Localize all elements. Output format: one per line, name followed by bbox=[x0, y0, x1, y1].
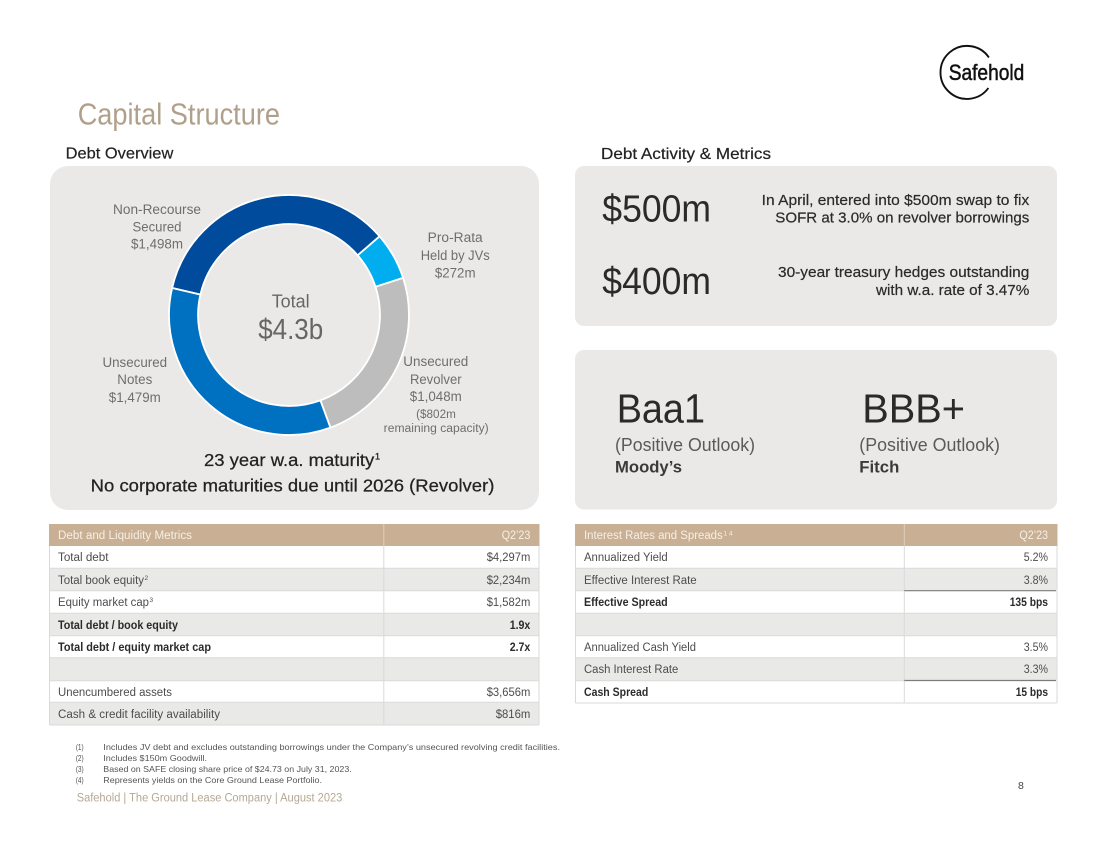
row: Annualized Yield: 5.2% bbox=[1024, 552, 1048, 564]
row: Equity market cap bbox=[58, 597, 530, 609]
row: Total debt / book equity: Total debt / book equity bbox=[58, 620, 179, 632]
segment: Unsecured Revolver bbox=[320, 278, 409, 428]
text: treasury hedges description bbox=[778, 265, 1029, 299]
text: treasury hedges description: with w.a. rate of 3.47% bbox=[875, 283, 1029, 299]
row: Cash Spread: Cash Spread bbox=[584, 687, 648, 699]
metric: $500m: $500m bbox=[602, 189, 711, 231]
row: Total book equity: $2,234m bbox=[487, 575, 530, 587]
row: Annualized Yield: Annualized Yield bbox=[584, 552, 668, 564]
label: Unsecured Revolver: remaining capacity) bbox=[384, 423, 489, 435]
label: Unsecured Notes bbox=[102, 355, 167, 405]
footnotes: (4) bbox=[76, 775, 84, 785]
row: Unencumbered assets: $3,656m bbox=[487, 687, 530, 699]
label: Pro-Rata Held by JVs: Held by JVs bbox=[421, 248, 490, 263]
row: Total debt / equity market cap: Total debt / equity market cap bbox=[58, 642, 211, 654]
table header: 1 4 bbox=[724, 530, 733, 538]
table header: Debt and Liquidity Metrics bbox=[58, 530, 192, 542]
row: Effective Interest Rate: Effective Interest Rate bbox=[584, 575, 697, 587]
rating: Fitch: BBB+ bbox=[862, 386, 965, 432]
row: Equity market cap: $1,582m bbox=[487, 597, 530, 609]
panel: debt overview bbox=[50, 166, 539, 510]
label: Non-Recourse Secured: $1,498m bbox=[131, 237, 183, 252]
row: Cash Interest Rate: 3.3% bbox=[1024, 664, 1048, 676]
row: Unencumbered assets bbox=[58, 687, 530, 699]
logo: Safehold bbox=[940, 46, 1024, 99]
rating: Moody's: Baa1 bbox=[617, 386, 705, 432]
table: interest rates and spreads bbox=[575, 524, 1058, 703]
label: Unsecured Revolver: Revolver bbox=[410, 372, 462, 387]
callout: maturity: 1 bbox=[375, 452, 380, 462]
label: Unsecured Revolver bbox=[384, 354, 489, 435]
row: Equity market cap: Equity market cap bbox=[58, 597, 149, 609]
segment: Unsecured Notes bbox=[169, 288, 330, 435]
table header bbox=[575, 524, 1058, 546]
segment: Non-Recourse Secured bbox=[172, 195, 380, 295]
label: Unsecured Notes: Unsecured bbox=[102, 355, 167, 370]
title: Capital Structure bbox=[78, 96, 280, 132]
footnotes: Includes $150m Goodwill. bbox=[103, 753, 207, 763]
label: Pro-Rata Held by JVs: Pro-Rata bbox=[428, 230, 483, 245]
label: Unsecured Revolver: ($802m bbox=[416, 409, 456, 421]
rating: Moody's: (Positive Outlook) bbox=[615, 435, 755, 455]
row: Annualized Cash Yield bbox=[584, 642, 1048, 654]
heading: Debt Activity & Metrics: Debt Activity & Metrics bbox=[601, 146, 771, 163]
donut centre total: $4.3b bbox=[258, 314, 323, 346]
row: Cash & credit facility availability bbox=[58, 709, 530, 721]
callout: maturity bbox=[91, 450, 494, 496]
text: swap description bbox=[762, 193, 1030, 227]
callout: maturity: No corporate maturities due until 2026 (Revolver) bbox=[91, 476, 494, 496]
table header: Q2’23 bbox=[1019, 530, 1048, 542]
row: Effective Interest Rate bbox=[584, 575, 1048, 587]
row: Total debt / book equity bbox=[58, 620, 531, 632]
row: Total book equity: 2 bbox=[144, 575, 148, 582]
callout: maturity: 23 year w.a. maturity bbox=[204, 450, 375, 470]
heading: Debt Overview: Debt Overview bbox=[66, 146, 174, 162]
rating: Moody's bbox=[615, 386, 755, 477]
table: debt and liquidity metrics bbox=[49, 524, 540, 725]
row: Effective Spread: 135 bps bbox=[1010, 597, 1048, 609]
footnotes: (1) bbox=[76, 742, 84, 752]
row: Annualized Cash Yield: Annualized Cash Yield bbox=[584, 642, 696, 654]
table header bbox=[49, 524, 540, 546]
row: Effective Spread bbox=[584, 597, 1048, 609]
footnotes: Includes JV debt and excludes outstanding borrowings under the Company’s unsecured revolving credit facilities. bbox=[103, 742, 560, 752]
panel: credit ratings bbox=[575, 350, 1057, 510]
row: Total debt / equity market cap bbox=[58, 642, 531, 654]
row: Cash Spread bbox=[584, 687, 1048, 699]
table header: Q2’23 bbox=[502, 530, 530, 542]
row: Cash & credit facility availability: $816m bbox=[496, 709, 530, 721]
label: Pro-Rata Held by JVs: $272m bbox=[435, 266, 476, 281]
label: Unsecured Notes: Notes bbox=[117, 372, 153, 387]
footnotes: (3) bbox=[76, 764, 84, 774]
row: Total debt bbox=[58, 552, 530, 564]
label: Pro-Rata Held by JVs bbox=[421, 230, 490, 281]
row: Cash & credit facility availability: Cash & credit facility availability bbox=[58, 709, 220, 721]
donut centre total: Total bbox=[272, 292, 310, 312]
rating: Fitch: (Positive Outlook) bbox=[859, 435, 1000, 455]
row: Cash Interest Rate bbox=[584, 664, 1048, 676]
table header: Interest Rates and Spreads bbox=[584, 530, 723, 542]
row: Equity market cap: 3 bbox=[150, 597, 154, 604]
footnotes: Represents yields on the Core Ground Lease Portfolio. bbox=[103, 775, 322, 785]
row: Total debt: $4,297m bbox=[487, 552, 530, 564]
row: Total debt / equity market cap: 2.7x bbox=[510, 642, 531, 654]
row: Total debt: Total debt bbox=[58, 552, 109, 564]
donut centre total bbox=[258, 292, 323, 346]
label: Non-Recourse Secured: Secured bbox=[132, 220, 182, 235]
donut chart: debt composition bbox=[169, 195, 409, 435]
row: Effective Interest Rate: 3.8% bbox=[1024, 575, 1048, 587]
row: Annualized Cash Yield: 3.5% bbox=[1024, 642, 1048, 654]
footnotes: Based on SAFE closing share price of $24.73 on July 31, 2023. bbox=[103, 764, 352, 774]
row: Cash Spread: 15 bps bbox=[1016, 687, 1048, 699]
metric: $400m: $400m bbox=[602, 261, 711, 303]
text: swap description: In April, entered into $500m swap to fix bbox=[762, 193, 1030, 209]
row: Total book equity: Total book equity bbox=[58, 575, 144, 587]
text: swap description: SOFR at 3.0% on revolver borrowings bbox=[775, 211, 1029, 227]
page number: 8 bbox=[1018, 780, 1024, 792]
footnotes: (2) bbox=[76, 753, 84, 763]
row: Total book equity bbox=[58, 575, 530, 587]
row: Unencumbered assets: Unencumbered assets bbox=[58, 687, 172, 699]
label: Non-Recourse Secured bbox=[113, 202, 201, 252]
label: Non-Recourse Secured: Non-Recourse bbox=[113, 202, 201, 217]
rating: Moody's: Moody’s bbox=[615, 458, 682, 477]
row: Effective Spread: Effective Spread bbox=[584, 597, 668, 609]
label: Unsecured Notes: $1,479m bbox=[109, 390, 161, 405]
panel: hedges bbox=[575, 166, 1057, 326]
row: Total debt / book equity: 1.9x bbox=[510, 620, 531, 632]
logo: Safehold: Safehold bbox=[949, 60, 1024, 85]
rating: Fitch: Fitch bbox=[859, 458, 899, 477]
label: Unsecured Revolver: Unsecured bbox=[403, 354, 468, 369]
footnotes bbox=[76, 742, 560, 785]
row: Cash Interest Rate: Cash Interest Rate bbox=[584, 664, 678, 676]
rating: Fitch bbox=[859, 386, 1000, 477]
segment: Pro-Rata Held by JVs bbox=[358, 236, 403, 287]
footer: Safehold | The Ground Lease Company | August 2023 bbox=[77, 793, 342, 805]
text: treasury hedges description: 30-year treasury hedges outstanding bbox=[778, 265, 1029, 281]
row: Annualized Yield bbox=[584, 552, 1048, 564]
label: Unsecured Revolver: $1,048m bbox=[410, 389, 462, 404]
